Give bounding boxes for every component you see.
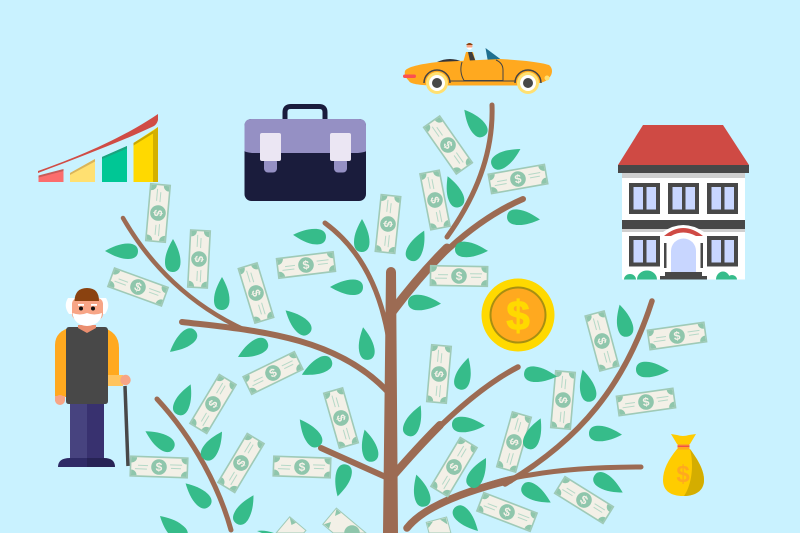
bill xyxy=(273,456,331,478)
bag shadow xyxy=(684,449,704,496)
bill: $ xyxy=(267,365,279,381)
bill xyxy=(430,266,488,286)
bushes xyxy=(624,270,737,280)
bill xyxy=(108,268,168,306)
neck xyxy=(78,325,96,333)
windshield xyxy=(486,48,503,62)
bill xyxy=(420,170,450,230)
door lines xyxy=(461,60,503,80)
cane xyxy=(125,386,128,466)
bill cropped at bottom edge xyxy=(323,508,366,533)
bill: $ xyxy=(381,220,395,228)
driver xyxy=(464,43,476,61)
floor band xyxy=(622,220,745,229)
bill: $ xyxy=(151,209,165,217)
icon: convertible car with driver xyxy=(403,43,552,94)
left sleeve xyxy=(55,327,72,397)
bill xyxy=(277,252,335,278)
left strap xyxy=(260,133,281,161)
door xyxy=(671,238,696,272)
bill: $ xyxy=(427,195,443,205)
bill xyxy=(427,345,451,403)
folded roof xyxy=(437,59,463,62)
rear wheel xyxy=(424,70,450,94)
bill: $ xyxy=(513,171,523,186)
right middle branch xyxy=(392,367,518,477)
bill: $ xyxy=(248,288,264,299)
bag tie xyxy=(678,444,690,450)
right forearm xyxy=(108,375,123,386)
bill: $ xyxy=(192,255,206,263)
lower left branch xyxy=(157,399,231,530)
bottom branch xyxy=(407,467,641,528)
bill: $ xyxy=(432,370,446,378)
beard xyxy=(72,313,102,326)
bill xyxy=(647,322,707,350)
icon: house xyxy=(618,125,749,280)
bill: $ xyxy=(594,336,610,346)
bill xyxy=(488,164,548,194)
bill: $ xyxy=(205,397,221,410)
shoes xyxy=(58,458,87,467)
steps xyxy=(660,272,707,280)
bill xyxy=(243,352,303,394)
right sleeve xyxy=(100,327,119,376)
bill: $ xyxy=(506,437,522,447)
tail light xyxy=(403,74,416,78)
trunk xyxy=(383,267,398,533)
bill: $ xyxy=(501,504,513,520)
eave xyxy=(618,165,749,173)
money bills xyxy=(108,116,707,533)
top branch xyxy=(447,105,492,237)
upper right branch xyxy=(392,199,523,312)
bill: $ xyxy=(333,413,349,423)
icon: gold dollar coin xyxy=(482,278,554,352)
icon: old man with cane xyxy=(55,288,131,467)
side hair xyxy=(66,298,108,314)
bill: $ xyxy=(155,460,163,474)
bill: $ xyxy=(456,269,463,283)
bill xyxy=(551,371,575,429)
bill: $ xyxy=(233,456,249,469)
left buckle xyxy=(264,158,277,172)
car body xyxy=(405,59,552,86)
porch columns xyxy=(664,243,666,268)
right buckle xyxy=(334,158,347,172)
bill cropped at bottom edge xyxy=(276,517,306,533)
bill: $ xyxy=(298,460,306,474)
porch awning xyxy=(663,225,704,236)
bill xyxy=(190,375,236,433)
eyes xyxy=(79,306,83,310)
icon: gold dollar coin: $ xyxy=(506,292,530,339)
cap xyxy=(74,288,99,301)
bill xyxy=(146,184,170,242)
torso xyxy=(66,327,108,404)
bill xyxy=(218,434,264,492)
headlight xyxy=(544,76,550,80)
house walls xyxy=(622,173,745,280)
bill xyxy=(585,311,619,371)
bill cropped at bottom edge xyxy=(426,517,451,533)
briefcase handle xyxy=(285,106,325,120)
bill xyxy=(188,230,210,288)
bill: $ xyxy=(642,395,651,409)
right strap xyxy=(330,133,351,161)
face xyxy=(72,298,103,320)
far left upper branch xyxy=(123,218,245,330)
dollar sign: $ xyxy=(676,461,690,488)
bill: $ xyxy=(440,138,456,152)
left hand xyxy=(55,395,65,405)
bill xyxy=(130,456,188,478)
right hand xyxy=(120,375,131,385)
upper windows xyxy=(629,183,738,214)
short lower branch xyxy=(321,448,388,478)
bill xyxy=(555,477,613,523)
lower windows xyxy=(629,236,738,266)
bill: $ xyxy=(132,279,144,295)
icon: briefcase xyxy=(244,106,366,201)
bill xyxy=(324,388,358,448)
briefcase flap xyxy=(244,119,366,153)
bill: $ xyxy=(446,460,462,473)
bill xyxy=(431,438,477,496)
bill xyxy=(424,116,472,174)
bill: $ xyxy=(577,492,591,508)
bill xyxy=(497,412,531,472)
bill: $ xyxy=(673,329,682,343)
upper centre-left branch xyxy=(325,223,388,335)
tree branches and trunk xyxy=(123,105,652,533)
tree leaves xyxy=(105,105,669,533)
bill xyxy=(238,263,274,323)
left long branch xyxy=(182,322,388,392)
bag body xyxy=(663,449,704,496)
icon: money bag xyxy=(663,434,704,496)
bill xyxy=(616,388,676,416)
eyebrows xyxy=(78,304,84,306)
bill: $ xyxy=(556,396,570,404)
bag neck xyxy=(671,434,696,444)
trousers xyxy=(70,402,87,460)
front wheel xyxy=(515,70,541,94)
roof xyxy=(618,125,749,165)
right long branch xyxy=(505,301,652,484)
bill xyxy=(477,493,537,531)
briefcase body xyxy=(244,119,366,201)
bill xyxy=(375,195,401,253)
bill: $ xyxy=(302,258,310,272)
icon: growth bar chart xyxy=(38,114,158,182)
